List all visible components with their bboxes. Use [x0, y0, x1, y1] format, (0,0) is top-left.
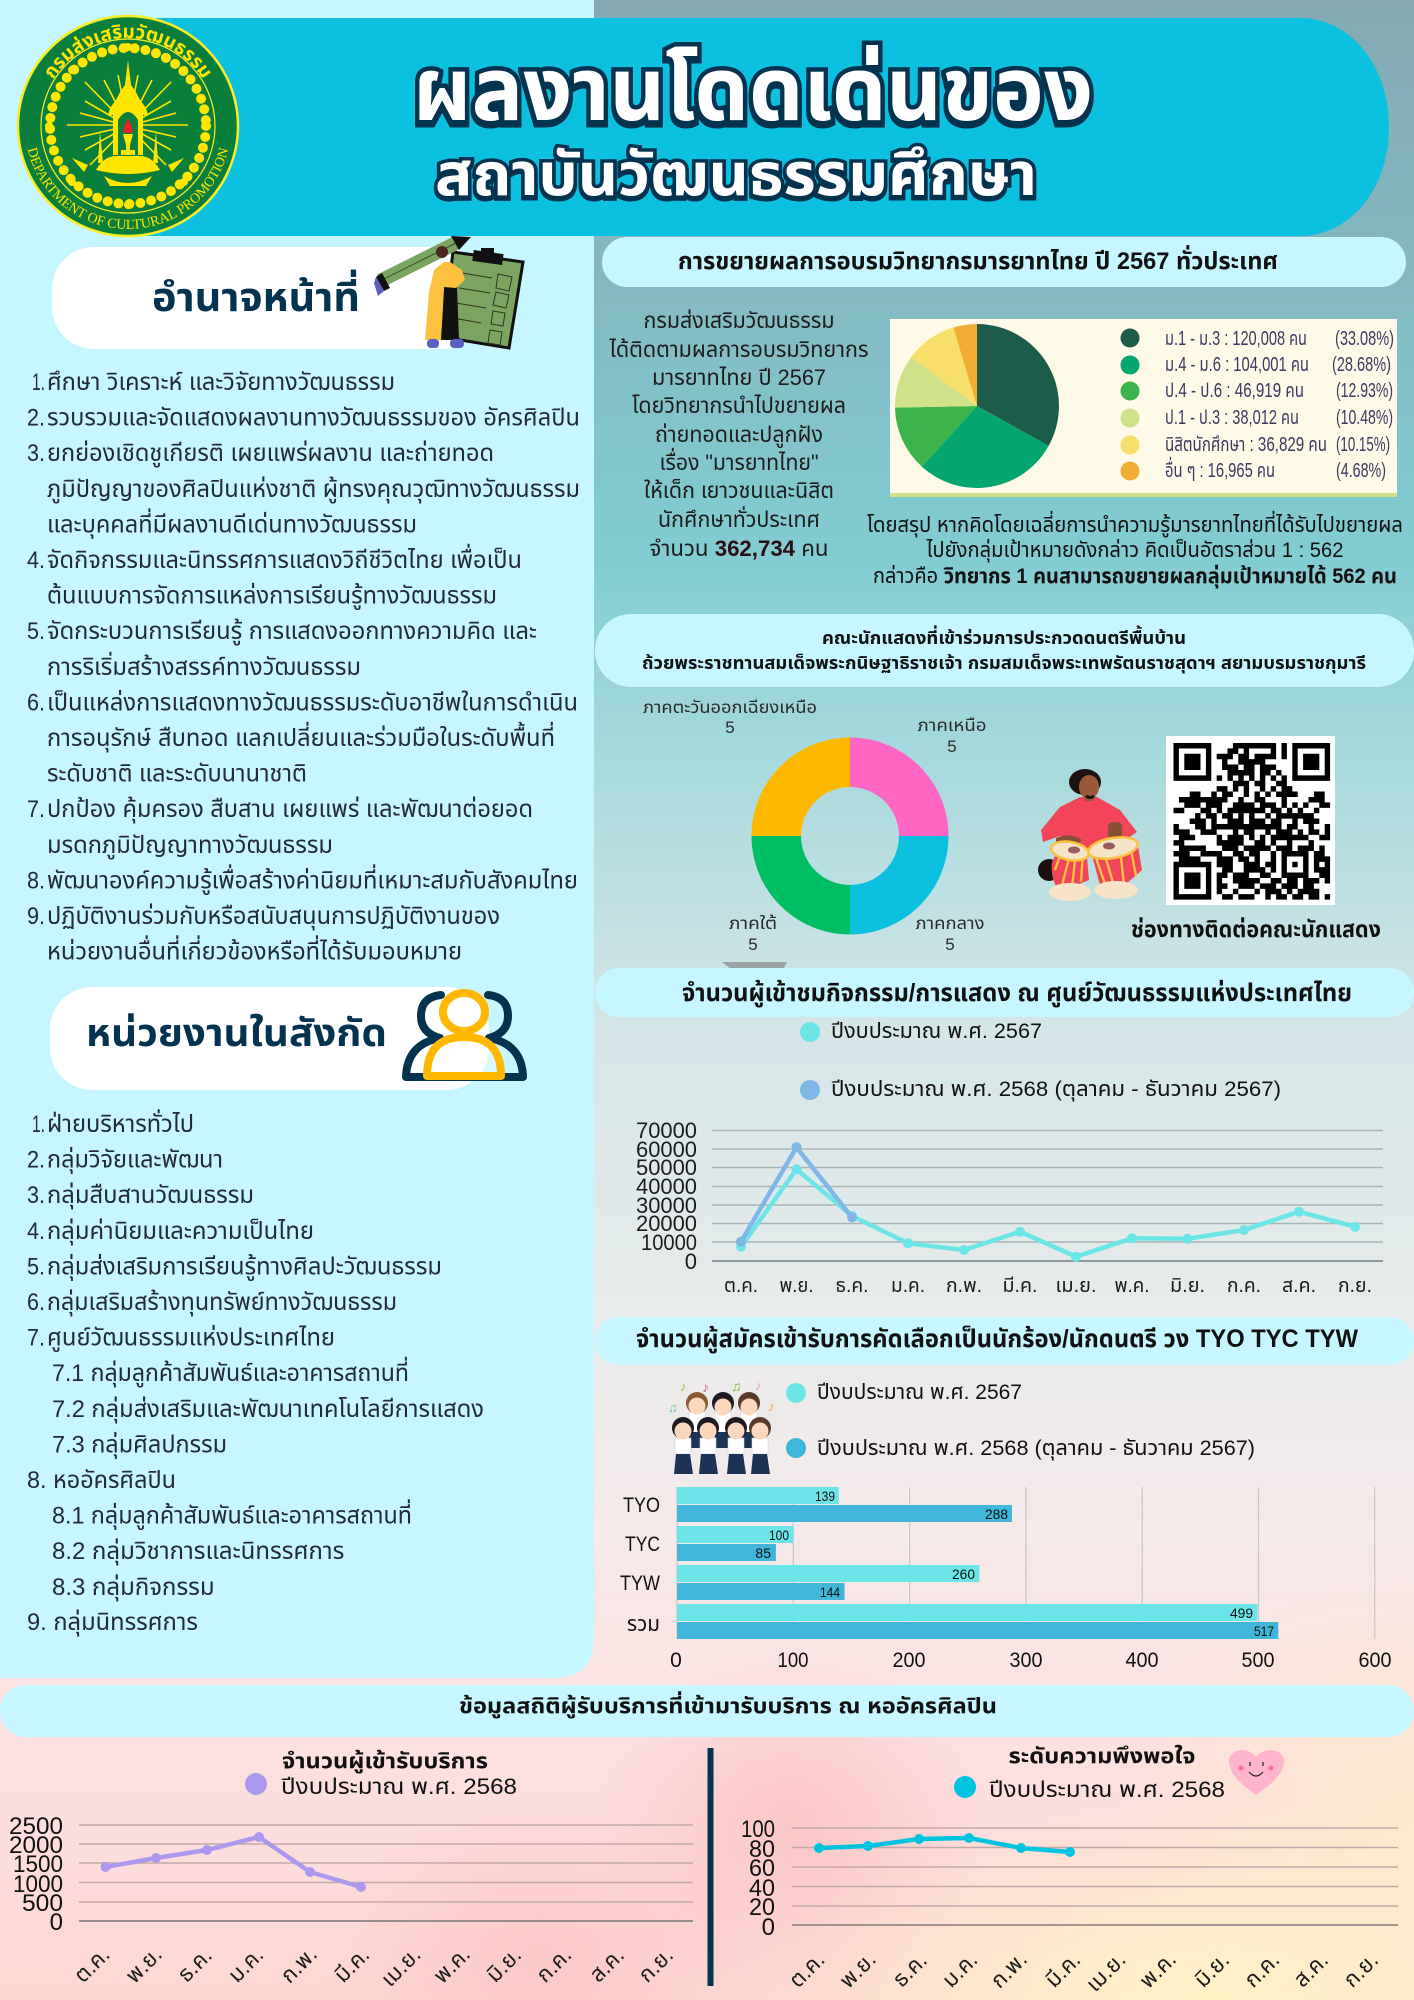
text block: list of duties: 6.: [27, 689, 45, 716]
line chart: satisfaction by month: พ.ย.: [835, 1947, 881, 1993]
heading: powers and duties: อำนาจหน้าที่: [152, 269, 360, 320]
heading pill: TYO TYC TYW applicants: จำนวนผู้สมัครเข้ารับการคัดเลือกเป็นนักร้อง/นักดนตรี วง TYO TYC TYW: [636, 1325, 1358, 1354]
chart heading: number of gallery visitors: ปีงบประมาณ พ.ศ. 2568: [281, 1774, 517, 1799]
text block: training summary: [609, 308, 868, 561]
donut label: central: ภาคกลาง: [916, 914, 984, 933]
line chart: visitors by month: มี.ค.: [1002, 1275, 1038, 1297]
heading pill: visitors: [595, 968, 1414, 1017]
pie legend: ป.4 - ป.6 : 46,919 คน: [1165, 380, 1304, 402]
QR code: [1166, 736, 1335, 905]
line chart: gallery visitors by month: 0: [50, 1909, 63, 1936]
bar chart: applicants by ensemble: รวม: [627, 1613, 660, 1636]
line chart legend: visitors: ปีงบประมาณ พ.ศ. 2567: [831, 1020, 1042, 1043]
donut chart: groups by region: 5: [945, 935, 955, 954]
bar chart legend: applicants: [786, 1381, 1255, 1461]
subtitle: สถาบันวัฒนธรรมศึกษา: [435, 141, 1037, 208]
text block: training summary: ได้ติดตามผลการอบรมวิทยากร: [609, 337, 868, 362]
line chart: gallery visitors by month: ม.ค.: [223, 1942, 268, 1987]
heading: powers and duties: [52, 247, 486, 349]
text block: conclusion: ไปยังกลุ่มเป้าหมายดังกล่าว คิดเป็นอัตราส่วน 1 : 562: [926, 538, 1344, 563]
pie chart panel: trainees by level: [890, 319, 1397, 497]
line chart: satisfaction by month: ส.ค.: [1288, 1947, 1333, 1992]
line chart: visitors by month: ก.พ.: [946, 1275, 982, 1297]
bar chart: applicants by ensemble: 85: [755, 1545, 771, 1561]
text block: list of units: 3.: [27, 1182, 45, 1209]
bar chart: applicants by ensemble: 517: [1254, 1623, 1274, 1639]
bar chart: applicants by ensemble: 139: [815, 1488, 835, 1504]
line chart: gallery visitors by month: 500: [22, 1890, 63, 1917]
pie legend: ม.1 - ม.3 : 120,008 คน: [1165, 328, 1307, 350]
text block: list of duties: 5.: [27, 618, 45, 645]
heading pill: TYO TYC TYW applicants: [595, 1317, 1414, 1365]
donut chart: groups by region: 5: [748, 935, 758, 954]
line chart: gallery visitors by month: มี.ค.: [329, 1942, 374, 1987]
text block: training summary: กรมส่งเสริมวัฒนธรรม: [644, 308, 834, 333]
line chart: visitors by month: 0: [685, 1249, 697, 1274]
text block: list of duties: ต้นแบบการจัดการแหล่งการเรียนรู้ทางวัฒนธรรม: [47, 582, 497, 611]
line chart: visitors by month: 10000: [641, 1230, 697, 1255]
text block: list of units: 7.3 กลุ่มศิลปกรรม: [52, 1430, 227, 1459]
line chart: gallery visitors by month: มิ.ย.: [481, 1942, 526, 1987]
line chart: gallery visitors by month: 1000: [13, 1871, 63, 1898]
line chart: visitors by month: ต.ค.: [724, 1275, 758, 1297]
bar chart: applicants by ensemble: 300: [1010, 1649, 1042, 1672]
pie legend: (28.68%): [1332, 354, 1391, 376]
text block: list of duties: 9.: [27, 903, 45, 930]
line chart: visitors by month: ธ.ค.: [836, 1275, 868, 1297]
donut chart: groups by region: [643, 698, 986, 954]
heading pill: trainer expansion: [602, 237, 1406, 287]
text block: conclusion: กล่าวคือ วิทยากร 1 คนสามารถขยายผลกลุ่มเป้าหมายได้ 562 คน: [873, 564, 1397, 589]
text block: list of units: กลุ่มวิจัยและพัฒนา: [47, 1146, 223, 1175]
line chart: satisfaction by month: มิ.ย.: [1189, 1947, 1234, 1992]
bar chart: applicants by ensemble: TYC: [625, 1533, 660, 1556]
line chart: satisfaction by month: มี.ค.: [1040, 1947, 1085, 1992]
text block: list of units: 2.: [27, 1147, 45, 1174]
line chart: visitors by month: [636, 1118, 1383, 1297]
line chart: visitors by month: ก.ค.: [1227, 1275, 1261, 1297]
bar chart: applicants by ensemble: 100: [769, 1527, 789, 1543]
line chart: visitors by month: ม.ค.: [891, 1275, 925, 1297]
heading pill: art gallery statistics: ข้อมูลสถิติผู้รับบริการที่เข้ามารับบริการ ณ หออัครศิลปิน: [459, 1691, 997, 1719]
series 2568: [736, 1142, 857, 1247]
text block: list of duties: และบุคคลที่มีผลงานดีเด่นทางวัฒนธรรม: [47, 507, 417, 539]
text block: list of units: 7.1 กลุ่มลูกค้าสัมพันธ์และอาคารสถานที่: [52, 1356, 409, 1388]
icon: smiling heart: [1229, 1750, 1284, 1795]
text block: list of duties: ปกป้อง คุ้มครอง สืบสาน เผยแพร่ และพัฒนาต่อยอด: [47, 795, 533, 824]
bar chart: applicants by ensemble: 400: [1126, 1649, 1158, 1672]
line chart: gallery visitors by month: [9, 1813, 693, 1992]
text block: training summary: จำนวน 362,734 คน: [650, 536, 828, 561]
series 2567: [736, 1164, 1360, 1262]
donut label: northeast: ภาคตะวันออกเฉียงเหนือ: [643, 698, 817, 717]
pie legend: (4.68%): [1336, 460, 1386, 482]
icon: person with giant pencil and clipboard: [374, 236, 523, 348]
icon: choir: ♪: [768, 1399, 774, 1414]
bar chart: applicants by ensemble: TYO: [623, 1494, 660, 1517]
line chart: visitors by month: 30000: [636, 1193, 697, 1218]
icon: choir: [668, 1378, 774, 1474]
icon: choir: ♪: [755, 1378, 762, 1393]
line chart: gallery visitors by month: ต.ค.: [69, 1942, 115, 1988]
text block: list of duties: 8.: [27, 867, 45, 894]
decorative fragment above heading: [722, 962, 787, 972]
bar chart: applicants by ensemble: 600: [1358, 1649, 1392, 1672]
bar chart: applicants by ensemble: 499: [1230, 1605, 1253, 1621]
text block: list of units: 8.3 กลุ่มกิจกรรม: [52, 1573, 215, 1602]
line chart: gallery visitors by month: 2000: [9, 1832, 63, 1859]
text block: list of duties: จัดกระบวนการเรียนรู้ การแสดงออกทางความคิด และ: [47, 618, 537, 646]
text block: list of units: กลุ่มสืบสานวัฒนธรรม: [47, 1181, 254, 1210]
header banner: [130, 18, 1389, 236]
icon: choir: ♫: [668, 1400, 678, 1415]
text block: list of duties: การริเริ่มสร้างสรรค์ทางวัฒนธรรม: [47, 651, 361, 681]
chart heading: satisfaction level: ปีงบประมาณ พ.ศ. 2568: [989, 1777, 1225, 1802]
text block: list of units: กลุ่มค่านิยมและความเป็นไทย: [47, 1217, 314, 1246]
text block: list of duties: 7.: [27, 796, 45, 823]
heading: affiliated units: หน่วยงานในสังกัด: [86, 1013, 387, 1055]
panel: left background: [0, 0, 594, 1678]
text block: list of duties: ภูมิปัญญาของศิลปินแห่งชาติ ผู้ทรงคุณวุฒิทางวัฒนธรรม: [47, 475, 580, 504]
bar chart: applicants by ensemble: 100: [778, 1649, 808, 1672]
line chart: gallery visitors by month: 1500: [13, 1851, 63, 1878]
line chart legend: visitors: ปีงบประมาณ พ.ศ. 2568 (ตุลาคม - ธันวาคม 2567): [831, 1078, 1281, 1102]
line chart: satisfaction by month: 100: [741, 1816, 775, 1843]
chart heading: satisfaction level: [954, 1745, 1225, 1802]
text block: list of units: ศูนย์วัฒนธรรมแห่งประเทศไทย: [47, 1324, 335, 1353]
main title: ผลงานโดดเด่นของ: [413, 40, 1093, 139]
heading pill: folk music contest: ถ้วยพระราชทานสมเด็จพระกนิษฐาธิราชเจ้า กรมสมเด็จพระเทพรัตนราชสุดาฯ สยามบรมราชกุมารี: [642, 653, 1366, 674]
line chart: visitors by month: 60000: [636, 1137, 697, 1162]
text block: list of duties: [27, 369, 580, 966]
text block: list of units: 7.2 กลุ่มส่งเสริมและพัฒนาเทคโนโลยีการแสดง: [52, 1395, 484, 1424]
line chart: satisfaction by month: ต.ค.: [784, 1947, 830, 1993]
text block: list of units: 7.: [27, 1325, 45, 1352]
text block: training summary: นักศึกษาทั่วประเทศ: [658, 505, 820, 532]
text block: list of duties: เป็นแหล่งการแสดงทางวัฒนธรรมระดับอาชีพในการดำเนิน: [47, 688, 578, 716]
text block: training summary: โดยวิทยากรนำไปขยายผล: [632, 393, 846, 418]
text block: list of duties: 1.: [32, 369, 45, 396]
line chart: satisfaction by month: 20: [749, 1894, 775, 1921]
text block: list of duties: ยกย่องเชิดชูเกียรติ เผยแพร่ผลงาน และถ่ายทอด: [47, 439, 494, 468]
text block: list of duties: 2.: [27, 405, 45, 432]
line chart: visitors by month: พ.ย.: [780, 1275, 814, 1297]
pie legend: อื่น ๆ : 16,965 คน: [1165, 456, 1275, 482]
line chart: visitors by month: เม.ย.: [1056, 1275, 1096, 1297]
donut chart: groups by region: 5: [947, 737, 957, 756]
pie legend: นิสิตนักศึกษา : 36,829 คน: [1165, 434, 1327, 456]
text block: list of units: 8. หออัครศิลปิน: [27, 1467, 176, 1494]
line chart: satisfaction by month: 60: [749, 1855, 775, 1882]
line chart: satisfaction by month: 0: [762, 1914, 775, 1941]
heading pill: art gallery statistics: [0, 1685, 1414, 1737]
bar chart: applicants by ensemble: 0: [670, 1649, 682, 1672]
text block: list of duties: มรดกภูมิปัญญาทางวัฒนธรรม: [47, 832, 333, 860]
heading pill: visitors: จำนวนผู้เข้าชมกิจกรรม/การแสดง ณ ศูนย์วัฒนธรรมแห่งประเทศไทย: [682, 979, 1352, 1008]
QR caption: ช่องทางติดต่อคณะนักแสดง: [1131, 916, 1381, 942]
chart heading: satisfaction level: ระดับความพึงพอใจ: [1008, 1745, 1196, 1768]
line chart: gallery visitors by month: ก.ค.: [531, 1942, 576, 1987]
icon: tabla drummer: [1038, 769, 1142, 901]
bar chart: applicants by ensemble: 288: [985, 1506, 1008, 1522]
line chart: satisfaction by month: พ.ค.: [1134, 1946, 1181, 1993]
line chart: satisfaction by month: ก.ย.: [1338, 1947, 1383, 1992]
text block: list of duties: 4.: [27, 547, 45, 574]
donut label: north: ภาคเหนือ: [918, 716, 986, 735]
text block: list of units: 4.: [27, 1218, 45, 1245]
icon: choir: ♪: [702, 1379, 709, 1395]
line chart: visitors by month: มิ.ย.: [1170, 1275, 1205, 1297]
text block: list of units: 8.1 กลุ่มลูกค้าสัมพันธ์และอาคารสถานที่: [52, 1499, 412, 1531]
bar chart: applicants by ensemble: 260: [952, 1566, 975, 1582]
donut label: south: ภาคใต้: [729, 913, 777, 933]
line chart: satisfaction by month: ม.ค.: [937, 1947, 982, 1992]
pie legend: ม.4 - ม.6 : 104,001 คน: [1165, 354, 1309, 376]
line chart: gallery visitors by month: 2500: [9, 1813, 63, 1840]
text block: list of duties: 3.: [27, 440, 45, 467]
donut chart: groups by region: 5: [725, 718, 735, 737]
heading pill: trainer expansion: การขยายผลการอบรมวิทยากรมารยาทไทย ปี 2567 ทั่วประเทศ: [678, 245, 1278, 275]
heading pill: folk music contest: คณะนักแสดงที่เข้าร่วมการประกวดดนตรีพื้นบ้าน: [822, 625, 1186, 648]
text block: list of units: 1.: [32, 1111, 45, 1138]
line chart: gallery visitors by month: เม.ย.: [376, 1942, 426, 1992]
line chart: satisfaction by month: 80: [749, 1836, 775, 1863]
text block: training summary: ถ่ายทอดและปลูกฝัง: [655, 422, 823, 448]
text block: list of duties: จัดกิจกรรมและนิทรรศการแสดงวิถีชีวิตไทย เพื่อเป็น: [47, 543, 522, 574]
text block: training summary: เรื่อง "มารยาทไทย": [660, 447, 818, 475]
bar chart: applicants by ensemble: 500: [1242, 1649, 1274, 1672]
divider: [708, 1748, 714, 1986]
line chart: gallery visitors by month: พ.ย.: [121, 1942, 167, 1988]
text block: training summary: ให้เด็ก เยาวชนและนิสิต: [644, 478, 834, 503]
line chart: gallery visitors by month: ธ.ค.: [173, 1943, 217, 1987]
line chart: satisfaction by month: [741, 1816, 1398, 1997]
bar chart legend: applicants: ปีงบประมาณ พ.ศ. 2568 (ตุลาคม - ธันวาคม 2567): [817, 1437, 1255, 1461]
icon: group of people: [406, 993, 523, 1077]
line chart: satisfaction by month: 40: [749, 1875, 775, 1902]
text block: list of units: 8.2 กลุ่มวิชาการและนิทรรศการ: [52, 1537, 344, 1566]
line chart: gallery visitors by month: ก.พ.: [275, 1941, 322, 1988]
line chart: gallery visitors by month: ก.ย.: [633, 1942, 678, 1987]
icon: choir: ♫: [731, 1378, 742, 1394]
line chart: satisfaction by month: เม.ย.: [1081, 1947, 1131, 1997]
logo: department emblem: DEPARTMENT OF CULTURAL PROMOTION: [28, 146, 228, 229]
text block: training summary: มารยาทไทย ปี 2567: [652, 365, 826, 390]
line chart: visitors by month: ก.ย.: [1338, 1275, 1372, 1297]
text block: list of units: [27, 1108, 484, 1637]
text block: list of duties: การอนุรักษ์ สืบทอด แลกเปลี่ยนและร่วมมือในระดับพื้นที่: [47, 721, 555, 753]
line chart: satisfaction by month: ก.พ.: [985, 1946, 1032, 1993]
pie legend: [1120, 328, 1394, 482]
logo: department emblem: กรมส่งเสริมวัฒนธรรม: [46, 24, 211, 79]
pie chart: [895, 324, 1059, 488]
line chart: visitors by month: 20000: [636, 1211, 697, 1236]
text block: list of duties: ระดับชาติ และระดับนานาชาติ: [47, 761, 307, 788]
text block: list of duties: ศึกษา วิเคราะห์ และวิจัยทางวัฒนธรรม: [47, 369, 395, 396]
line chart: visitors by month: ส.ค.: [1282, 1275, 1316, 1297]
text block: list of duties: หน่วยงานอื่นที่เกี่ยวข้องหรือที่ได้รับมอบหมาย: [47, 935, 462, 966]
bar chart: applicants by ensemble: 144: [820, 1584, 840, 1600]
chart heading: number of gallery visitors: [245, 1750, 517, 1799]
text block: conclusion: [867, 510, 1403, 589]
line chart legend: visitors: [800, 1020, 1281, 1102]
heading pill: folk music contest: [595, 614, 1414, 687]
line chart: visitors by month: 50000: [636, 1155, 697, 1180]
text block: list of units: กลุ่มส่งเสริมการเรียนรู้ทางศิลปะวัฒนธรรม: [47, 1252, 442, 1281]
bar chart: applicants by ensemble: TYW: [620, 1572, 660, 1595]
pie legend: (33.08%): [1335, 328, 1394, 350]
line chart: gallery visitors by month: ส.ค.: [584, 1942, 629, 1987]
text block: list of units: 5.: [27, 1253, 45, 1280]
line chart: visitors by month: 70000: [636, 1118, 697, 1143]
heading: affiliated units: [50, 987, 489, 1090]
pie legend: ป.1 - ป.3 : 38,012 คน: [1165, 407, 1299, 429]
bar chart legend: applicants: ปีงบประมาณ พ.ศ. 2567: [817, 1381, 1022, 1404]
text block: list of duties: รวบรวมและจัดแสดงผลงานทางวัฒนธรรมของ อัครศิลปิน: [47, 405, 580, 432]
text block: list of duties: พัฒนาองค์ความรู้เพื่อสร้างค่านิยมที่เหมาะสมกับสังคมไทย: [47, 863, 578, 895]
icon: choir: ♪: [680, 1379, 686, 1394]
logo: department emblem: [16, 14, 240, 238]
text block: list of duties: ปฏิบัติงานร่วมกับหรือสนับสนุนการปฏิบัติงานของ: [47, 902, 500, 931]
bar chart: applicants by ensemble: 200: [892, 1649, 926, 1672]
bar chart: applicants by ensemble: [620, 1487, 1392, 1672]
line chart: visitors by month: 40000: [636, 1174, 697, 1199]
line chart: satisfaction by month: ธ.ค.: [888, 1948, 932, 1992]
text block: list of units: 9. กลุ่มนิทรรศการ: [27, 1608, 198, 1637]
text block: list of units: 6.: [27, 1289, 45, 1316]
line chart: satisfaction by month: ก.ค.: [1239, 1947, 1284, 1992]
text block: conclusion: โดยสรุป หากคิดโดยเฉลี่ยการนำความรู้มารยาทไทยที่ได้รับไปขยายผล: [867, 510, 1403, 538]
line chart: visitors by month: พ.ค.: [1114, 1275, 1150, 1297]
text block: list of units: ฝ่ายบริหารทั่วไป: [47, 1108, 194, 1138]
line chart: gallery visitors by month: พ.ค.: [428, 1941, 475, 1988]
text block: list of units: กลุ่มเสริมสร้างทุนทรัพย์ทางวัฒนธรรม: [47, 1288, 397, 1317]
chart heading: number of gallery visitors: จำนวนผู้เข้ารับบริการ: [282, 1750, 488, 1774]
